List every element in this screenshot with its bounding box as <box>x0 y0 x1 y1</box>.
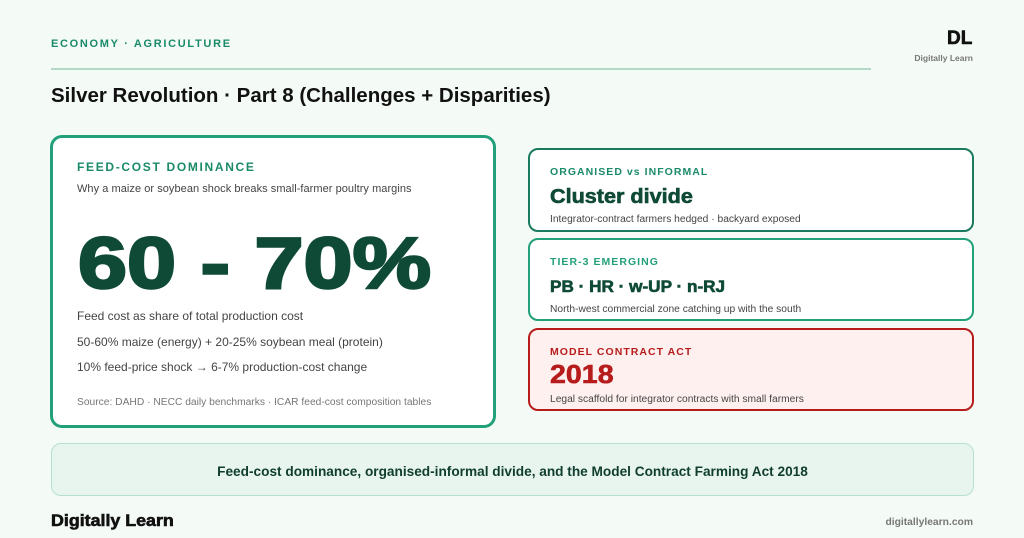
shock effect: 10% feed-price shock → 6-7% production-cost change <box>77 360 367 374</box>
eyebrow: economy agriculture: ECONOMY · AGRICULTURE <box>51 38 232 50</box>
logo: DL: DL <box>947 28 972 49</box>
logo caption: Digitally Learn <box>914 53 973 63</box>
feed composition: 50-60% maize (energy) + 20-25% soybean meal (protein) <box>77 335 383 349</box>
card label: ORGANISED vs INFORMAL <box>550 166 708 178</box>
card: tier-3 emerging <box>528 238 974 321</box>
card note: Integrator-contract farmers hedged · backyard exposed <box>550 214 801 225</box>
card value: 2018 <box>550 359 614 389</box>
header rule <box>51 68 871 70</box>
footer url: digitallylearn.com <box>885 517 973 528</box>
takeaway banner <box>51 443 974 496</box>
card label: MODEL CONTRACT ACT <box>550 346 692 358</box>
card note: North-west commercial zone catching up with the south <box>550 304 801 315</box>
card value: Cluster divide <box>550 186 693 208</box>
panel label: FEED-COST DOMINANCE <box>77 160 256 174</box>
card value: PB · HR · w-UP · n-RJ <box>550 278 725 296</box>
title: Silver Revolution · Part 8 (Challenges + Disparities) <box>51 84 551 107</box>
panel: feed-cost dominance <box>50 135 496 428</box>
card note: Legal scaffold for integrator contracts with small farmers <box>550 394 804 405</box>
card: model contract act <box>528 328 974 411</box>
card label: TIER-3 EMERGING <box>550 256 659 268</box>
card: organised vs informal <box>528 148 974 232</box>
stat description: Feed cost as share of total production cost <box>77 309 303 323</box>
source note: Source: DAHD · NECC daily benchmarks · ICAR feed-cost composition tables <box>77 397 431 408</box>
takeaway text: Feed-cost dominance, organised-informal divide, and the Model Contract Farming Act 2018 <box>217 464 808 479</box>
panel subtitle: Why a maize or soybean shock breaks small-farmer poultry margins <box>77 183 412 195</box>
footer brand: Digitally Learn <box>51 512 174 530</box>
big stat: 60 - 70% <box>78 224 431 304</box>
